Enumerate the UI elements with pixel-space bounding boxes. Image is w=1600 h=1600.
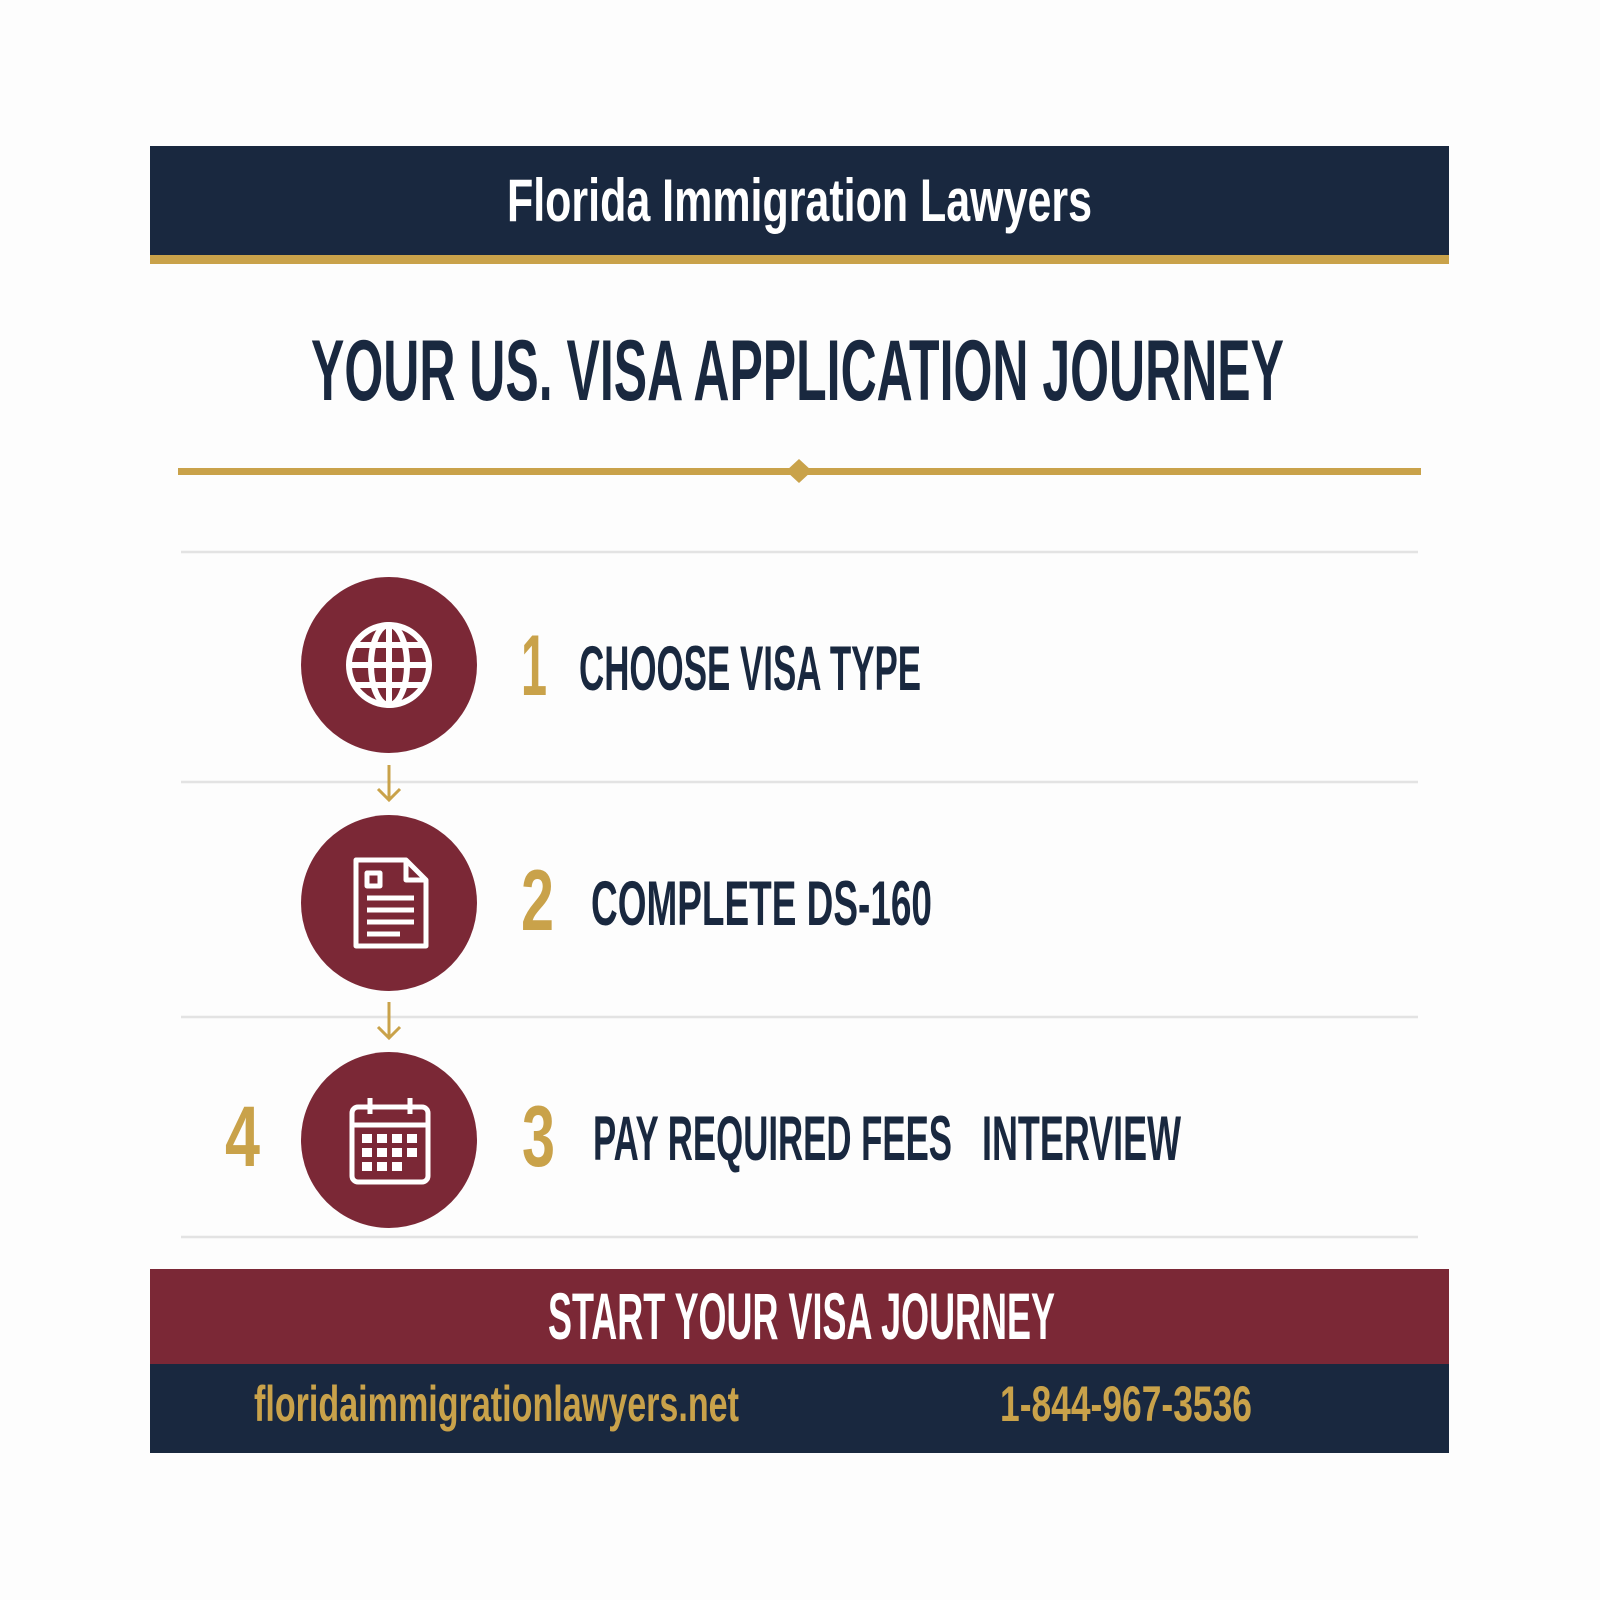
icon: document — [301, 815, 477, 991]
step 2: COMPLETE DS-160 — [591, 869, 932, 939]
step 3: INTERVIEW — [982, 1104, 1181, 1174]
call to action band: START YOUR VISA JOURNEY — [548, 1279, 1055, 1353]
step 2: 2 — [521, 853, 554, 949]
step 1 — [301, 577, 921, 753]
step 3 — [301, 1052, 1181, 1228]
header bar: Florida Immigration Lawyers — [507, 167, 1092, 234]
icon: calendar — [301, 1052, 477, 1228]
step 3: 3 — [522, 1089, 555, 1185]
arrow 1 — [378, 765, 400, 800]
step 2 — [301, 815, 932, 991]
contact bar — [150, 1364, 1449, 1453]
call to action band — [150, 1269, 1449, 1365]
step 3: PAY REQUIRED FEES — [593, 1104, 952, 1174]
contact bar: 1-844-967-3536 — [1000, 1376, 1252, 1432]
contact bar: floridaimmigrationlawyers.net — [254, 1376, 739, 1432]
step 1: 1 — [521, 618, 547, 714]
step 1: CHOOSE VISA TYPE — [579, 634, 921, 704]
step 4 number: 4 — [225, 1089, 260, 1185]
arrow 2 — [378, 1002, 400, 1038]
gold divider with diamond — [178, 459, 1421, 483]
header bar — [150, 146, 1449, 264]
icon: globe — [301, 577, 477, 753]
